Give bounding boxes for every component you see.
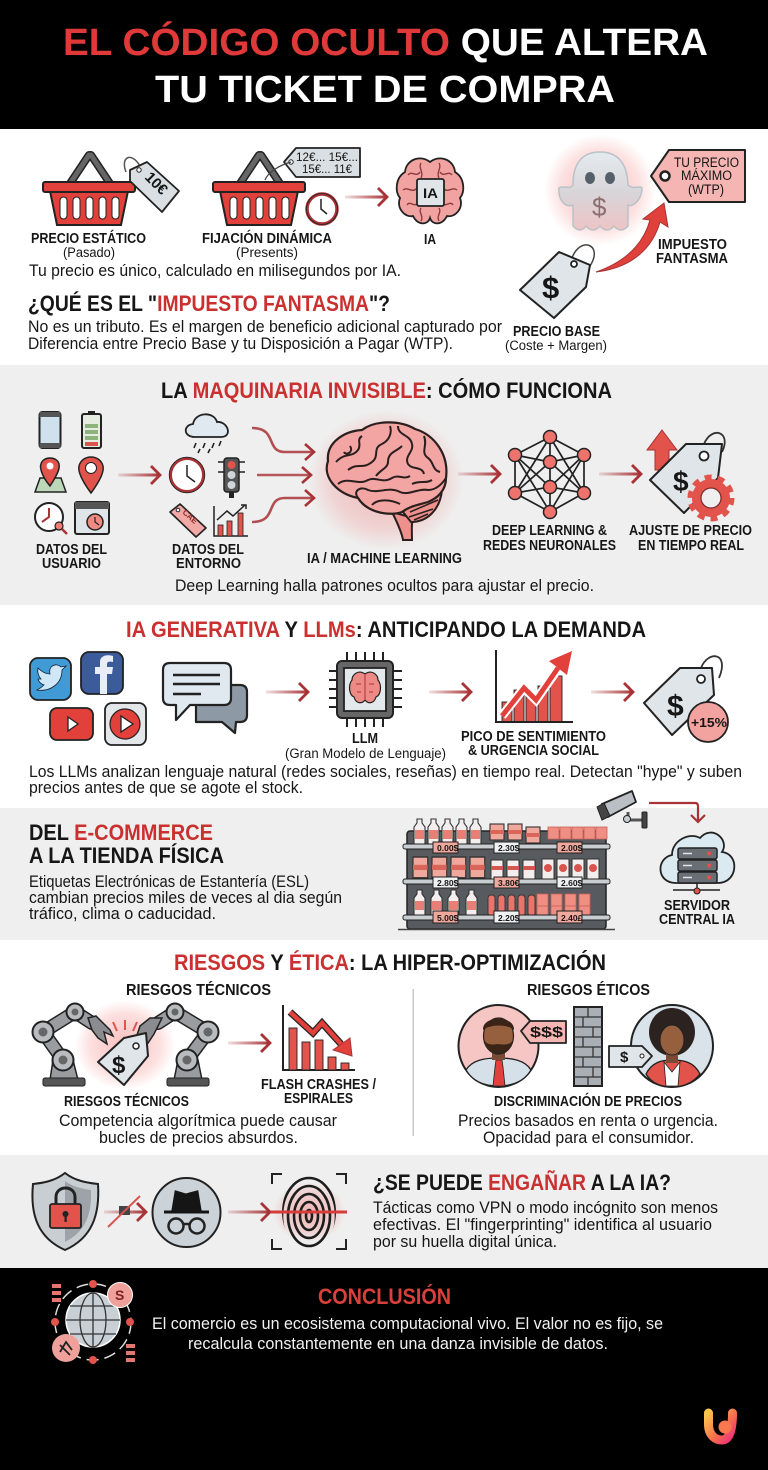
icon: tag +15%: $ <box>667 690 684 723</box>
icon: brain with IA chip: IA <box>423 185 438 201</box>
text: etiquetas: tráfico, clima o caducidad. <box>29 904 216 923</box>
label: riesgos técnicos: RIESGOS TÉCNICOS <box>64 1093 189 1110</box>
label: datos del entorno: ENTORNO <box>176 556 241 572</box>
arrow <box>345 188 387 206</box>
icon: globe network: S <box>115 1287 124 1303</box>
label: LLM <box>285 731 446 761</box>
icon: tag tu precio máximo: TU PRECIO <box>674 155 739 170</box>
text: tácticas: efectivas. El "fingerprinting" identifica al usuario <box>373 1215 712 1234</box>
arrow: crossed out <box>104 1196 146 1227</box>
heading: A LA TIENDA FÍSICA <box>29 843 224 868</box>
illustration: shelf with price labels: 0.00$ <box>437 843 459 853</box>
icon: woman portrait <box>609 1005 713 1087</box>
label: precio estático: (Pasado) <box>63 245 115 260</box>
illustration: shelf with price labels <box>398 819 615 930</box>
icon group: datos del entorno: CAE <box>181 508 200 526</box>
label: LLM: (Gran Modelo de Lenguaje) <box>285 746 446 761</box>
illustration: shelf with price labels: 2.80$ <box>437 878 459 888</box>
label: flash crashes: ESPIRALES <box>284 1091 353 1107</box>
icon: dynamic basket with tag and clock: 15€... 11€ <box>302 164 353 176</box>
text: tácticas: Tácticas como VPN o modo incógnito son menos <box>373 1198 718 1217</box>
text: competencia <box>59 1111 337 1147</box>
icon group: datos del usuario <box>35 411 109 534</box>
icon: dynamic basket with tag and clock: 12€... 15€... <box>296 152 358 164</box>
illustration: shelf with price labels: 5.00$ <box>437 913 459 923</box>
illustration: shelf with price labels: 2.60$ <box>561 878 583 888</box>
icon: robot arms fighting over a price tag <box>32 1000 218 1090</box>
heading: impuesto fantasma: ¿QUÉ ES EL "IMPUESTO FANTASMA"? <box>28 291 390 316</box>
panel: header <box>0 0 768 129</box>
label: IA: IA <box>424 232 436 248</box>
illustration: shelf with price labels: 2.20$ <box>498 913 520 923</box>
icon: neural network <box>508 430 590 518</box>
text: definición: Diferencia entre Precio Base y tu Disposición a Pagar (WTP). <box>28 334 453 353</box>
text: precio único: Tu precio es único, calculado en milisegundos por IA. <box>29 261 401 280</box>
icon: ghost: $ <box>592 192 607 222</box>
label: pico de sentimiento: PICO DE SENTIMIENTO <box>461 729 606 745</box>
label: pico de sentimiento: & URGENCIA SOCIAL <box>468 743 599 759</box>
icon: incognito <box>152 1178 220 1247</box>
icon group: datos del entorno <box>169 414 248 537</box>
label: impuesto fantasma: IMPUESTO <box>658 237 727 253</box>
label: servidor central IA: SERVIDOR <box>664 898 730 914</box>
label: datos del entorno <box>172 542 244 572</box>
label: impuesto fantasma <box>656 237 728 267</box>
arrow <box>266 683 308 701</box>
icon: tag tu precio máximo: (WTP) <box>688 182 724 197</box>
icon: shield with lock <box>32 1173 98 1250</box>
panel: IA generativa y LLMs <box>0 605 768 808</box>
text: definición: No es un tributo. Es el margen de beneficio adicional capturado por <box>28 317 502 336</box>
label: ajuste de precio <box>629 523 752 554</box>
icon: static basket with tag: 10€ <box>141 169 171 199</box>
icon: robot arms fighting over a price tag: $ <box>112 1052 126 1079</box>
text: etiquetas: cambian precios miles de veces al dia según <box>29 888 342 907</box>
label: datos del usuario: DATOS DEL <box>36 542 107 558</box>
icon: camera <box>597 791 647 828</box>
icon: tag tu precio máximo <box>651 150 745 202</box>
arrow <box>591 683 633 701</box>
text: precios basados: Precios basados en renta o urgencia. <box>458 1111 718 1130</box>
subheading: riesgos técnicos: RIESGOS TÉCNICOS <box>126 980 271 999</box>
label: precio base: (Coste + Margen) <box>505 338 607 353</box>
icon: woman portrait: $ <box>620 1049 629 1066</box>
label: fijación dinámica: FIJACIÓN DINÁMICA <box>202 229 332 247</box>
arrow: camera to cloud <box>649 803 705 822</box>
panel: riesgos y ética <box>0 940 768 1155</box>
icon: tag precio base <box>520 245 594 318</box>
icon: tag +15%: +15% <box>691 715 727 730</box>
title line 2: TU TICKET DE COMPRA <box>155 69 615 111</box>
label: ajuste de precio: EN TIEMPO REAL <box>638 538 744 554</box>
icon: tag precio base: $ <box>542 270 559 305</box>
chart: social sentiment <box>496 650 573 722</box>
icon: tag with gear and up arrow <box>647 430 732 519</box>
label: deep learning: DEEP LEARNING & <box>492 523 607 539</box>
heading: RIESGOS Y ÉTICA: LA HIPER-OPTIMIZACIÓN <box>174 950 606 975</box>
text: precios basados <box>458 1111 718 1147</box>
label: fijación dinámica: (Presents) <box>236 245 298 260</box>
icon: cloud server <box>660 833 734 894</box>
arrow <box>118 466 160 484</box>
text: competencia: Competencia algorítmica puede causar <box>59 1111 337 1130</box>
label: datos del usuario: USUARIO <box>42 556 101 572</box>
label: IA machine learning: IA / MACHINE LEARNING <box>307 551 462 567</box>
label: pico de sentimiento <box>461 729 606 759</box>
illustration: shelf with price labels: 2.00$ <box>561 843 583 853</box>
icon: ghost <box>544 134 656 246</box>
label: precio base: PRECIO BASE <box>513 324 600 340</box>
text: definición <box>28 317 502 353</box>
label: deep learning: REDES NEURONALES <box>483 538 616 554</box>
heading: ¿SE PUEDE ENGAÑAR A LA IA? <box>373 1170 671 1195</box>
text: tácticas <box>373 1198 718 1251</box>
text: deep learning: Deep Learning halla patrones ocultos para ajustar el precio. <box>175 576 594 595</box>
icon: brick wall <box>574 1007 602 1086</box>
heading: conclusión: CONCLUSIÓN <box>318 1284 451 1309</box>
icon: tag with gear and up arrow: $ <box>673 466 689 497</box>
panel: conclusión <box>0 1268 768 1470</box>
label: ajuste de precio: AJUSTE DE PRECIO <box>629 523 752 539</box>
label: datos del entorno: DATOS DEL <box>172 542 244 558</box>
icons: social networks <box>30 652 146 745</box>
label: fijación dinámica <box>202 229 332 260</box>
icon: man portrait <box>458 1005 566 1087</box>
illustration: shelf with price labels: 2.40£ <box>561 913 583 923</box>
icon: brain with IA chip <box>397 158 463 223</box>
label: flash crashes <box>261 1077 376 1107</box>
icon: tag tu precio máximo: MÁXIMO <box>681 168 732 183</box>
icon: man portrait: $$$ <box>530 1024 564 1041</box>
label: precio estático: PRECIO ESTÁTICO <box>31 230 146 247</box>
icon: large brain <box>308 410 464 550</box>
icon: dynamic basket with tag and clock <box>213 148 360 225</box>
heading: DEL E-COMMERCE <box>29 820 213 845</box>
icon: chat bubbles <box>163 663 247 733</box>
text: competencia: bucles de precios absurdos. <box>99 1128 298 1147</box>
illustration: shelf with price labels: 2.30$ <box>498 843 520 853</box>
text: precios basados: Opacidad para el consumidor. <box>483 1128 694 1147</box>
label: discriminación: DISCRIMINACIÓN DE PRECIOS <box>494 1092 682 1110</box>
panel: del e-commerce a la tienda física <box>0 791 768 940</box>
icon: fingerprint scan <box>271 1174 347 1254</box>
arrow: curved red <box>596 203 668 272</box>
label: precio estático <box>31 230 146 260</box>
text: conclusión <box>152 1314 663 1353</box>
panel: precio e impuesto fantasma <box>0 129 768 365</box>
heading: LA MAQUINARIA INVISIBLE: CÓMO FUNCIONA <box>161 378 612 403</box>
panel: la maquinaria invisible <box>0 365 768 605</box>
label: datos del usuario <box>36 542 107 572</box>
label: flash crashes: FLASH CRASHES / <box>261 1077 376 1093</box>
subheading: riesgos éticos: RIESGOS ÉTICOS <box>527 980 650 999</box>
icon: LLM chip <box>329 652 402 727</box>
text: LLMs <box>29 762 742 797</box>
arrow <box>228 1034 270 1052</box>
text: etiquetas: Etiquetas Electrónicas de Estantería (ESL) <box>29 872 309 891</box>
label: deep learning <box>483 523 616 554</box>
label: LLM: LLM <box>352 731 378 747</box>
label: precio base <box>505 324 607 353</box>
heading: IA GENERATIVA Y LLMs: ANTICIPANDO LA DEMANDA <box>126 617 646 642</box>
arrow <box>458 465 500 483</box>
illustration: shelf with price labels: 3.80€ <box>498 878 520 888</box>
arrow <box>228 1203 270 1221</box>
icon: tag +15% <box>644 656 728 742</box>
label: impuesto fantasma: FANTASMA <box>656 251 728 267</box>
text: conclusión: El comercio es un ecosistema computacional vivo. El valor no es fijo, se <box>152 1314 663 1333</box>
icon: globe network <box>51 1280 135 1364</box>
arrows: flows into brain <box>252 428 314 522</box>
text: etiquetas <box>29 872 342 923</box>
label: servidor central IA: CENTRAL IA <box>659 912 735 928</box>
arrow <box>429 683 471 701</box>
icon: logo <box>708 1413 732 1440</box>
text: tácticas: por su huella digital única. <box>373 1232 557 1251</box>
heading <box>29 820 224 868</box>
text: conclusión: recalcula constantemente en una danza invisible de datos. <box>188 1334 608 1353</box>
title line 1: EL CÓDIGO OCULTO QUE ALTERA <box>63 20 708 64</box>
text: LLMs: precios antes de que se agote el stock. <box>29 778 303 797</box>
arrow <box>599 465 641 483</box>
icon: static basket with tag <box>43 155 179 225</box>
label: servidor central IA <box>659 898 735 928</box>
chart: price crash <box>283 1005 355 1070</box>
panel: se puede engañar a la IA <box>0 1155 768 1268</box>
